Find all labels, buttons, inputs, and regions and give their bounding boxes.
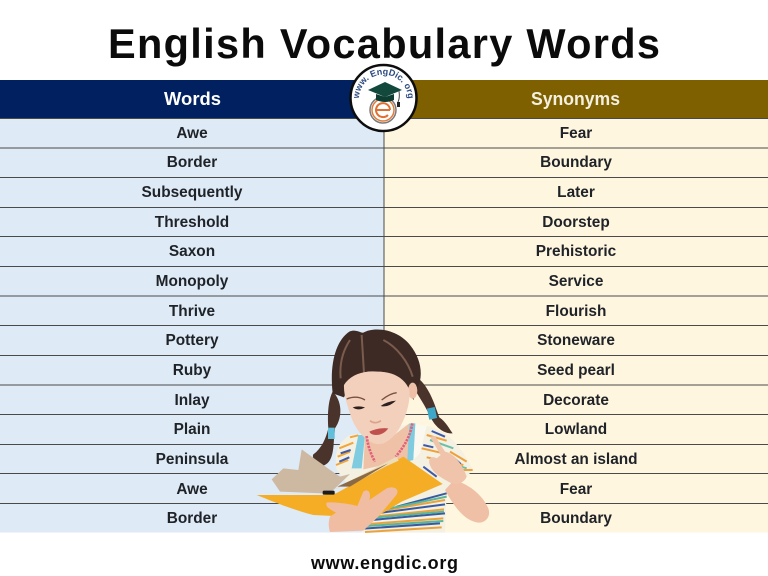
illustration: girl reading a yellow book xyxy=(257,329,489,533)
blue straps xyxy=(352,435,365,468)
logo: EngDic badge: www. EngDic. org xyxy=(354,69,413,98)
column text: Synonyms: Stoneware xyxy=(537,332,615,349)
table: vocabulary words and synonyms xyxy=(0,80,768,532)
ear xyxy=(408,383,417,399)
mouth xyxy=(369,428,388,435)
footer website: www.engdic.org xyxy=(310,553,458,573)
column text: Synonyms: Flourish xyxy=(546,303,606,320)
column text: Words: Monopoly xyxy=(156,273,229,290)
column text: Words: Inlay xyxy=(174,392,210,409)
column text: Words: Awe xyxy=(176,125,208,142)
column text: Synonyms: Seed pearl xyxy=(537,362,615,379)
column text: Synonyms xyxy=(514,125,638,527)
column text: Words: Pottery xyxy=(165,332,219,349)
column text: Words: Ruby xyxy=(173,362,212,379)
column text: Words: Thrive xyxy=(169,303,216,320)
column text: Words xyxy=(142,125,243,527)
column text: Synonyms: Boundary xyxy=(540,510,612,527)
neck and chest xyxy=(363,423,409,469)
white strap xyxy=(413,424,427,460)
nose xyxy=(370,421,381,423)
column text: Synonyms: Boundary xyxy=(540,154,612,171)
logo: EngDic badge xyxy=(349,64,418,132)
column text: Words: Saxon xyxy=(169,243,215,260)
column text: Words: Plain xyxy=(174,421,210,438)
header: Words: Words xyxy=(164,88,221,109)
left braid xyxy=(313,392,340,466)
right braid xyxy=(413,378,453,433)
pointing hand xyxy=(429,436,467,484)
column text: Synonyms: Service xyxy=(549,273,604,290)
necklace xyxy=(367,423,412,462)
column text: Synonyms: Prehistoric xyxy=(536,243,617,260)
header: Synonyms: Synonyms xyxy=(531,88,620,109)
column text: Words: Threshold xyxy=(155,214,229,231)
column: Synonyms background xyxy=(384,118,768,532)
column text: Words: Subsequently xyxy=(142,184,243,201)
column text: Synonyms: Almost an island xyxy=(514,451,638,468)
column text: Synonyms: Fear xyxy=(560,125,592,142)
column text: Words: Border xyxy=(167,510,217,527)
column text: Words: Awe xyxy=(176,481,208,498)
face xyxy=(344,371,410,444)
book pages xyxy=(272,449,350,493)
hand holding book xyxy=(326,487,397,532)
shirt xyxy=(336,423,473,533)
title: English Vocabulary Words xyxy=(108,20,660,67)
eyes and brows xyxy=(347,393,397,400)
column text: Synonyms: Doorstep xyxy=(542,214,610,231)
column text: Synonyms: Lowland xyxy=(545,421,607,438)
column text: Words: Peninsula xyxy=(156,451,229,468)
column: Words background xyxy=(0,118,384,532)
hair xyxy=(332,329,421,400)
column text: Words: Border xyxy=(167,154,217,171)
right arm xyxy=(445,480,489,523)
column text: Synonyms: Decorate xyxy=(543,392,609,409)
header: Synonyms xyxy=(384,80,768,118)
book cover xyxy=(257,457,443,517)
column text: Synonyms: Fear xyxy=(560,481,592,498)
header: Words xyxy=(0,80,384,118)
column text: Synonyms: Later xyxy=(557,184,595,201)
